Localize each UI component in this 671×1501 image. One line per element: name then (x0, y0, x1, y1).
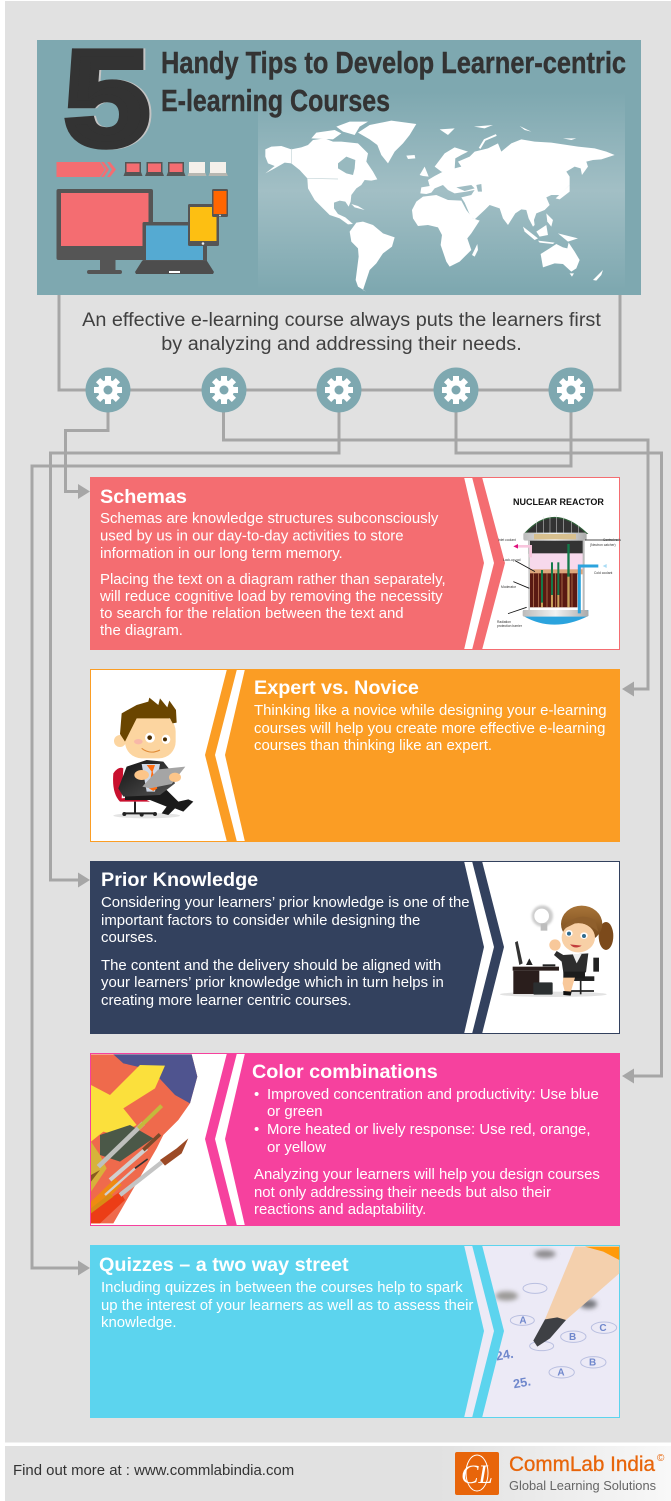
bullet list: • (254, 1121, 259, 1138)
body text: reactions and adaptability. (254, 1201, 426, 1218)
gear node 1 (86, 368, 130, 412)
body text: Considering your learners’ prior knowledge is one of the (101, 894, 470, 911)
gear node 4 (434, 368, 478, 412)
panel: color combinations (90, 1053, 620, 1226)
image: pencil on answer sheet: A (519, 1315, 527, 1326)
bullet list (254, 1086, 599, 1156)
panel: quizzes (90, 1245, 620, 1418)
devices icon (56, 189, 228, 274)
gear node 2 (202, 368, 246, 412)
body text: creating more learner centric courses. (101, 992, 351, 1009)
body text: to search for the relation between the text and (100, 605, 404, 622)
footer bar (5, 1446, 671, 1501)
body text: Schemas are knowledge structures subconsciously (100, 510, 439, 527)
footer link text: Find out more at : www.commlabindia.com (13, 1462, 294, 1479)
illustration: woman at desk (500, 905, 613, 997)
body text: courses than thinking like an expert. (254, 737, 492, 754)
image: nuclear reactor: Moderator (501, 585, 517, 589)
body text: courses. (101, 929, 157, 946)
hero banner (37, 25, 641, 295)
progress arrow (56, 162, 116, 177)
heading: Prior Knowledge (101, 869, 258, 891)
image: pencil on answer sheet: 24. (495, 1347, 515, 1364)
body text (101, 894, 470, 1009)
number five: 5 (67, 25, 151, 174)
panel: expert vs novice (90, 669, 620, 842)
image: nuclear reactor: Cold coolant (594, 571, 612, 575)
image: nuclear reactor: Inlet coolant (498, 538, 516, 542)
body text: The content and the delivery should be aligned with (101, 957, 441, 974)
intro text (82, 309, 601, 355)
logo wordmark: © (657, 1453, 665, 1464)
bullet list: or yellow (267, 1139, 326, 1156)
number five: 5 (65, 25, 149, 174)
logo wordmark (509, 1453, 665, 1493)
logo wordmark: CommLab India (509, 1453, 655, 1476)
body text: not only addressing their needs but also their (254, 1184, 551, 1201)
illustration: man with tablet (113, 698, 193, 818)
heading: Expert vs. Novice (254, 677, 419, 699)
image: pencil on answer sheet: C (599, 1323, 607, 1334)
body text: knowledge. (101, 1314, 176, 1331)
heading: Color combinations (252, 1061, 438, 1083)
intro text: An effective e-learning course always puts the learners first (82, 309, 601, 331)
image: nuclear reactor: Radiation (497, 620, 511, 624)
image: nuclear reactor: Control rods (603, 538, 621, 542)
image: nuclear reactor: protection barrier (497, 624, 523, 628)
image: nuclear reactor: Lock-up rod (503, 558, 521, 562)
body text: Placing the text on a diagram rather than separately, (100, 571, 446, 588)
body text: the diagram. (100, 622, 183, 639)
body text: up the interest of your learners as well as to assess their (101, 1297, 473, 1314)
image: pencil on answer sheet: B (569, 1332, 576, 1343)
image: pencil on answer sheet: 25. (512, 1374, 532, 1391)
progress laptops (124, 162, 228, 176)
logo mark (455, 1452, 499, 1495)
body text: courses will help you create more effective e-learning (254, 720, 605, 737)
body text: used by us in our day-to-day activities to store (100, 528, 404, 544)
image: nuclear reactor: (Neutron catcher) (590, 543, 616, 547)
heading: Quizzes – a two way street (99, 1254, 349, 1276)
body text (101, 1279, 473, 1331)
body text (99, 510, 446, 639)
bullet list: • (254, 1086, 259, 1103)
title: E-learning Courses (161, 83, 390, 118)
bullet list: More heated or lively response: Use red, orange, (267, 1121, 590, 1138)
gear nodes (86, 368, 594, 412)
image: nuclear reactor: NUCLEAR REACTOR (513, 497, 604, 507)
connector lines and arrows (32, 295, 662, 1276)
panel: schemas (90, 477, 621, 650)
world map (265, 121, 615, 292)
title (161, 45, 626, 118)
image: pencil on answer sheet: A (557, 1368, 565, 1379)
bullet list: Improved concentration and productivity: Use blue (267, 1086, 599, 1103)
body text: Including quizzes in between the courses help to spark (101, 1279, 463, 1296)
body text: Analyzing your learners will help you design courses (254, 1166, 600, 1183)
gear node 5 (548, 368, 594, 412)
logo mark: CL (461, 1460, 493, 1489)
image: paint and brushes (91, 1054, 197, 1223)
bullet list: or green (267, 1103, 323, 1120)
body text (254, 702, 607, 754)
image: nuclear reactor (497, 497, 621, 628)
body text: information in our long term memory. (100, 545, 343, 562)
logo wordmark: Global Learning Solutions (509, 1478, 656, 1493)
image: pencil on answer sheet: B (589, 1358, 596, 1369)
body text: important factors to consider while designing the (101, 912, 420, 929)
body text (254, 1166, 600, 1218)
panel: prior knowledge (90, 861, 620, 1034)
intro text: by analyzing and addressing their needs. (161, 333, 522, 355)
heading: Schemas (100, 486, 187, 508)
body text: will reduce cognitive load by removing the necessity (99, 588, 443, 605)
body text: Thinking like a novice while designing your e-learning (254, 702, 607, 719)
body text: your learners’ prior knowledge which in turn helps in (101, 974, 444, 991)
image: pencil on answer sheet (495, 1247, 619, 1391)
gear node 3 (316, 368, 362, 412)
